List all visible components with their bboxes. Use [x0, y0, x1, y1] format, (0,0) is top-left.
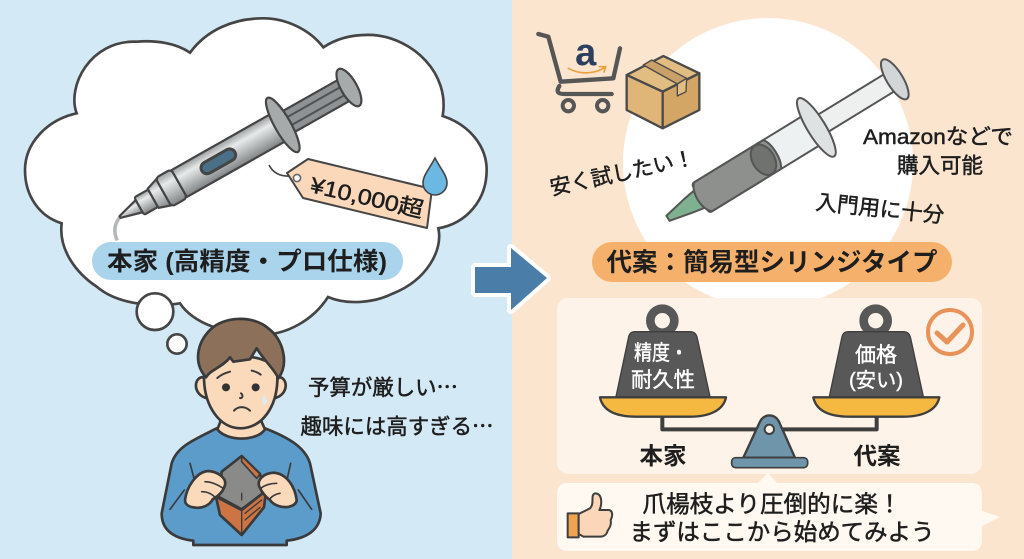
cart frame [538, 34, 620, 94]
wheels [563, 100, 608, 111]
panel: left background [0, 0, 512, 559]
nozzle [663, 191, 704, 227]
tear [262, 395, 267, 405]
sweater [162, 428, 321, 545]
left pan [600, 397, 726, 417]
arrow [475, 248, 547, 310]
icon: thumbs up [568, 493, 612, 537]
eyes [222, 383, 260, 391]
icon: budget syringe [650, 46, 919, 247]
orange smile [568, 67, 606, 73]
panel: right background [512, 0, 1024, 559]
fulcrum base [732, 458, 808, 468]
hair [198, 319, 284, 378]
left weight ring [650, 309, 674, 333]
fulcrum [743, 415, 795, 458]
text: enough for beginners: 入門用に十分 [814, 190, 945, 228]
thought cloud [25, 18, 487, 354]
beam [662, 416, 877, 429]
callout: recommendation [557, 473, 1000, 551]
cart logo letter: a [575, 32, 597, 74]
right hand [259, 473, 297, 507]
callout text: 爪楊枝より圧倒的に楽！ [642, 491, 902, 517]
right weight [829, 332, 923, 397]
weight label: price: (安い) [849, 369, 903, 392]
label pill: alternative [592, 242, 952, 282]
person holding empty wallet [162, 319, 321, 545]
price text: ¥10,000超 [307, 172, 426, 223]
wallet details [242, 493, 262, 535]
grease shade [745, 140, 781, 180]
right weight ring [864, 309, 888, 333]
end disk [876, 56, 914, 103]
neck [217, 418, 265, 439]
text: budget worry: 趣味には高すぎる… [300, 410, 494, 441]
weight label: precision and durability: 耐久性 [631, 369, 695, 392]
label: original: 本家 [640, 443, 686, 469]
brows nose mouth [217, 371, 261, 411]
left hand [185, 471, 225, 508]
text: available on Amazon: 購入可能 [897, 154, 983, 178]
flange [791, 94, 842, 161]
right pan [813, 397, 939, 417]
tag body [287, 159, 432, 228]
text: want to try cheaply: 安く試したい！ [548, 147, 697, 200]
plunger rod [813, 72, 898, 135]
weight label: precision and durability: 精度・ [634, 342, 688, 365]
white circle behind cheap syringe [623, 18, 913, 308]
weight label: price [849, 344, 903, 392]
wallet flap edge [242, 456, 260, 478]
callout: recommendation: まずはここから始めてみよう [630, 519, 934, 545]
weight label: price: 価格 [855, 344, 897, 367]
icon: shopping cart [538, 32, 620, 111]
tag hole [293, 174, 301, 182]
icon: check mark [928, 310, 972, 354]
panel: balance comparison [557, 298, 982, 474]
icon: cardboard box [627, 56, 699, 128]
face [204, 356, 277, 428]
barrel grease [689, 138, 785, 215]
label pill: alternative: 代案：簡易型シリンジタイプ [606, 249, 938, 277]
balance scale [600, 309, 939, 468]
icon: professional syringe [93, 57, 371, 251]
wallet inside [218, 456, 265, 509]
callout bubble [557, 473, 1000, 551]
label pill: original [92, 242, 403, 280]
tag string [269, 165, 292, 176]
wallet front [216, 491, 266, 535]
text: budget worry: 予算が厳しい… [308, 371, 458, 402]
label: alternative: 代案 [854, 443, 901, 469]
price tag [269, 159, 432, 228]
label pill: original: 本家 (高精度・プロ仕様) [107, 248, 387, 276]
left weight [616, 332, 710, 397]
fulcrum pin [765, 425, 774, 434]
finger lines [170, 463, 312, 509]
text: available on Amazon [863, 125, 1013, 178]
ears [196, 377, 286, 398]
text: budget worry [300, 371, 494, 441]
text: available on Amazon: Amazonなどで [863, 125, 1013, 149]
barrel glass [692, 114, 824, 213]
icon: sweat drop [423, 158, 447, 195]
weight label: precision and durability [631, 342, 695, 392]
